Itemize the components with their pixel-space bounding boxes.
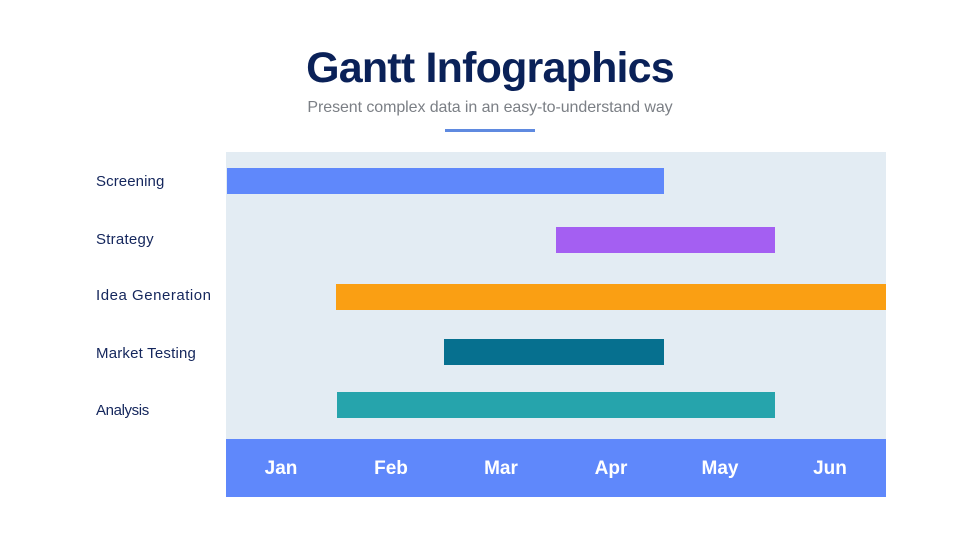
- subtitle: Present complex data in an easy-to-understand way: [307, 99, 673, 116]
- label: Analysis: Analysis: [96, 402, 149, 419]
- bar: Idea Generation: [336, 284, 886, 310]
- label: Market Testing: Market Testing: [96, 345, 196, 362]
- month: Apr: Apr: [595, 458, 627, 479]
- bar: Analysis: [337, 392, 775, 418]
- month: Mar: Mar: [484, 458, 518, 479]
- month: Feb: Feb: [374, 458, 408, 479]
- chart background panel: [226, 152, 886, 440]
- month: Jun: Jun: [813, 458, 847, 479]
- gantt chart: [226, 152, 886, 497]
- month: May: May: [702, 458, 738, 479]
- month: Jan: Jan: [265, 458, 297, 479]
- label: Idea Generation: Idea Generation: [96, 287, 212, 304]
- month axis band: [226, 439, 886, 497]
- title underline: [445, 129, 535, 132]
- label: Screening: Screening: [96, 173, 164, 190]
- bar: Screening: [227, 168, 664, 194]
- bar: Market Testing: [444, 339, 664, 365]
- bar: Strategy: [556, 227, 775, 253]
- title: Gantt Infographics: [306, 44, 674, 92]
- label: Strategy: Strategy: [96, 231, 154, 248]
